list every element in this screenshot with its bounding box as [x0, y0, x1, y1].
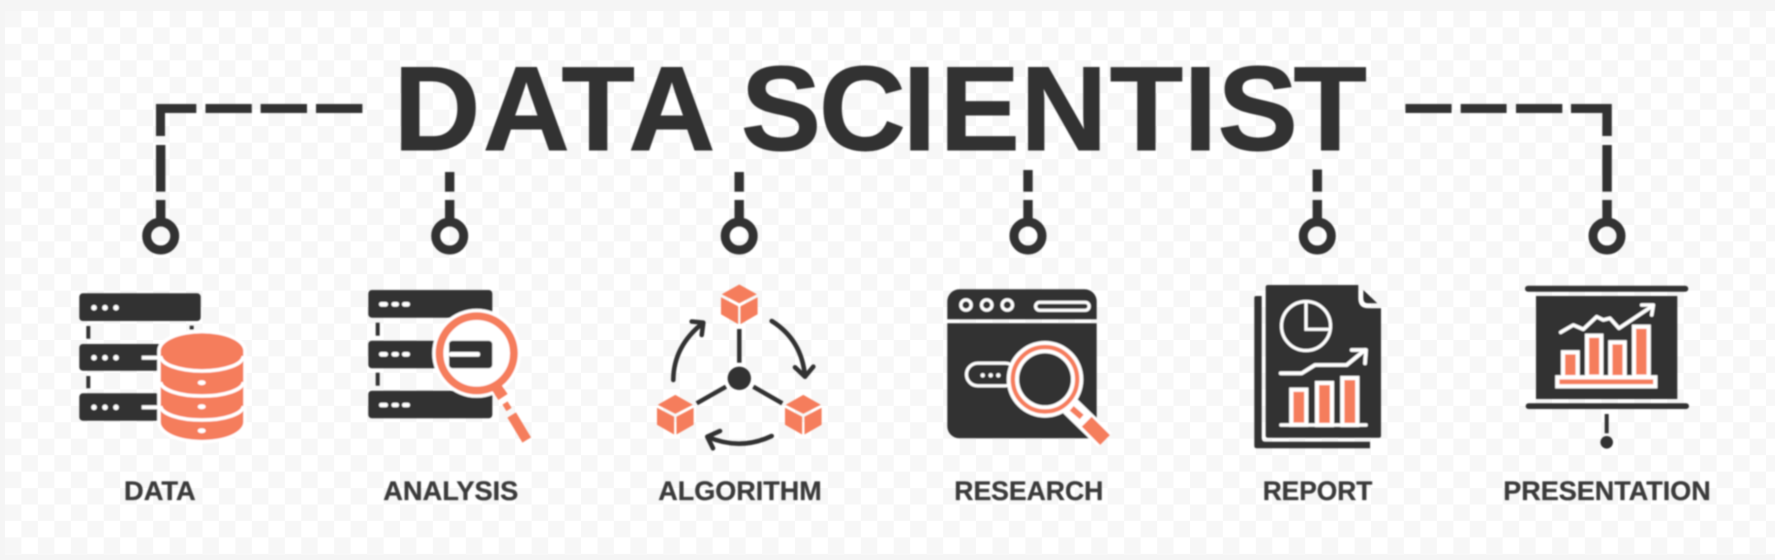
server lights: [91, 305, 158, 410]
cubes: [657, 284, 822, 435]
connector: report: [1303, 170, 1331, 250]
label: presentation: PRESENTATION: [1503, 476, 1711, 506]
icon: report document: [1254, 285, 1381, 448]
connector: algorithm: [725, 172, 753, 250]
label: analysis: ANALYSIS: [383, 476, 518, 506]
server stack: [368, 290, 492, 418]
window controls: [961, 300, 1089, 310]
pie chart: [1282, 302, 1330, 350]
front page: [1266, 285, 1381, 438]
magnifier: [432, 309, 527, 440]
magnifier: [1007, 341, 1105, 440]
trend arrow: [1561, 305, 1653, 332]
bar chart: [1557, 327, 1655, 386]
icon: algorithm cubes cycle: [657, 284, 822, 448]
connector: research: [1014, 170, 1042, 250]
connector: right bracket to presentation: [1405, 104, 1621, 250]
label: research: RESEARCH: [954, 476, 1103, 506]
cycle arrows: [673, 321, 813, 448]
label: report: REPORT: [1263, 476, 1372, 506]
projector screen: [1525, 286, 1689, 449]
icon: presentation screen: [1525, 286, 1689, 449]
bar chart: [1291, 378, 1357, 425]
connector: analysis: [436, 172, 464, 250]
icon: data servers and database: [79, 293, 243, 440]
hub and spokes: [697, 329, 782, 403]
icon: analysis servers and magnifier: [368, 290, 527, 440]
database cylinder: [161, 333, 243, 440]
icon: research browser and magnifier: [947, 289, 1105, 440]
label: algorithm: ALGORITHM: [658, 476, 822, 506]
title: DATA SCIENTIST: [394, 42, 1367, 176]
search field: [966, 363, 1016, 386]
connector: left bracket to data: [147, 104, 362, 250]
back page: [1254, 296, 1370, 448]
server stack: [79, 293, 201, 421]
browser window: [947, 289, 1097, 319]
label: data: DATA: [124, 476, 196, 506]
trend arrow: [1281, 350, 1366, 373]
server lights: [379, 302, 410, 407]
